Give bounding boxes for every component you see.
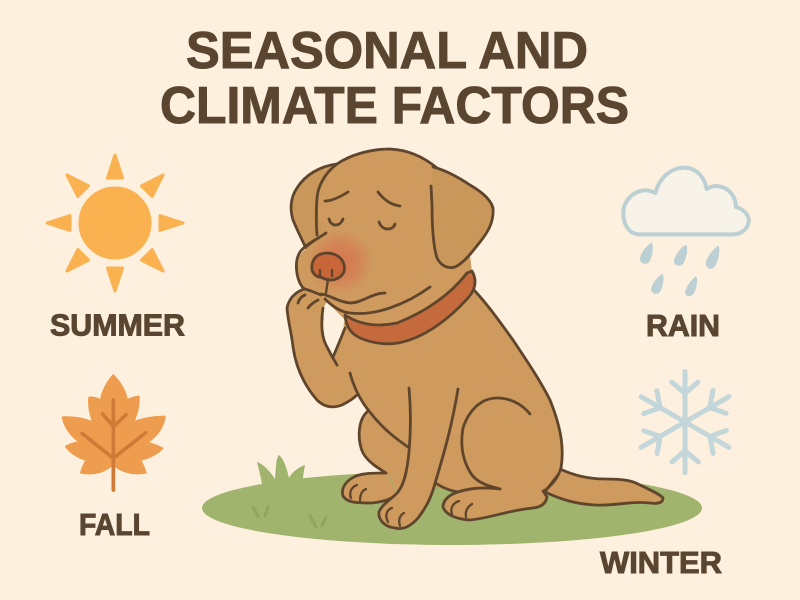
dog arm outline: [287, 289, 357, 407]
label: summer: SUMMER: [50, 308, 185, 342]
dog collar: [345, 271, 475, 344]
icon: rain cloud: [623, 168, 749, 296]
head outline: [316, 149, 437, 235]
title: [160, 22, 629, 135]
dog left ear: [291, 164, 340, 248]
title: SEASONAL AND: [186, 22, 588, 80]
label: rain: RAIN: [646, 308, 720, 343]
blush: [307, 230, 373, 294]
grass ground: [202, 455, 702, 545]
dog right ear: [431, 167, 493, 268]
background gap under chin: [323, 308, 345, 357]
dog body: [333, 290, 562, 495]
dog nose: [312, 253, 344, 293]
muzzle outline: [296, 233, 326, 295]
dog toes: [350, 485, 472, 517]
dog hip and left flank: [359, 412, 458, 492]
dog hind foot left: [342, 473, 398, 503]
dog eyebrows: [325, 192, 400, 206]
dog: [287, 149, 663, 529]
dog closed eyes: [329, 219, 395, 229]
dog chest line: [350, 373, 408, 447]
title: CLIMATE FACTORS: [160, 77, 629, 135]
dog back outline: [474, 290, 562, 492]
dog tail: [545, 469, 663, 505]
dog hind foot right: [443, 488, 547, 520]
label: winter: WINTER: [600, 545, 722, 580]
icon: maple leaf: [63, 375, 165, 490]
icon: snowflake: [634, 371, 736, 473]
dog raised arm fill: [287, 289, 362, 407]
dog front leg: [379, 388, 458, 529]
dog thigh: [462, 398, 530, 489]
label: fall: FALL: [79, 507, 150, 542]
dog jaw and mouth: [321, 287, 430, 313]
dog head and neck fill: [297, 149, 474, 335]
dog fingers: [298, 295, 318, 308]
icon: sun: [47, 155, 183, 291]
